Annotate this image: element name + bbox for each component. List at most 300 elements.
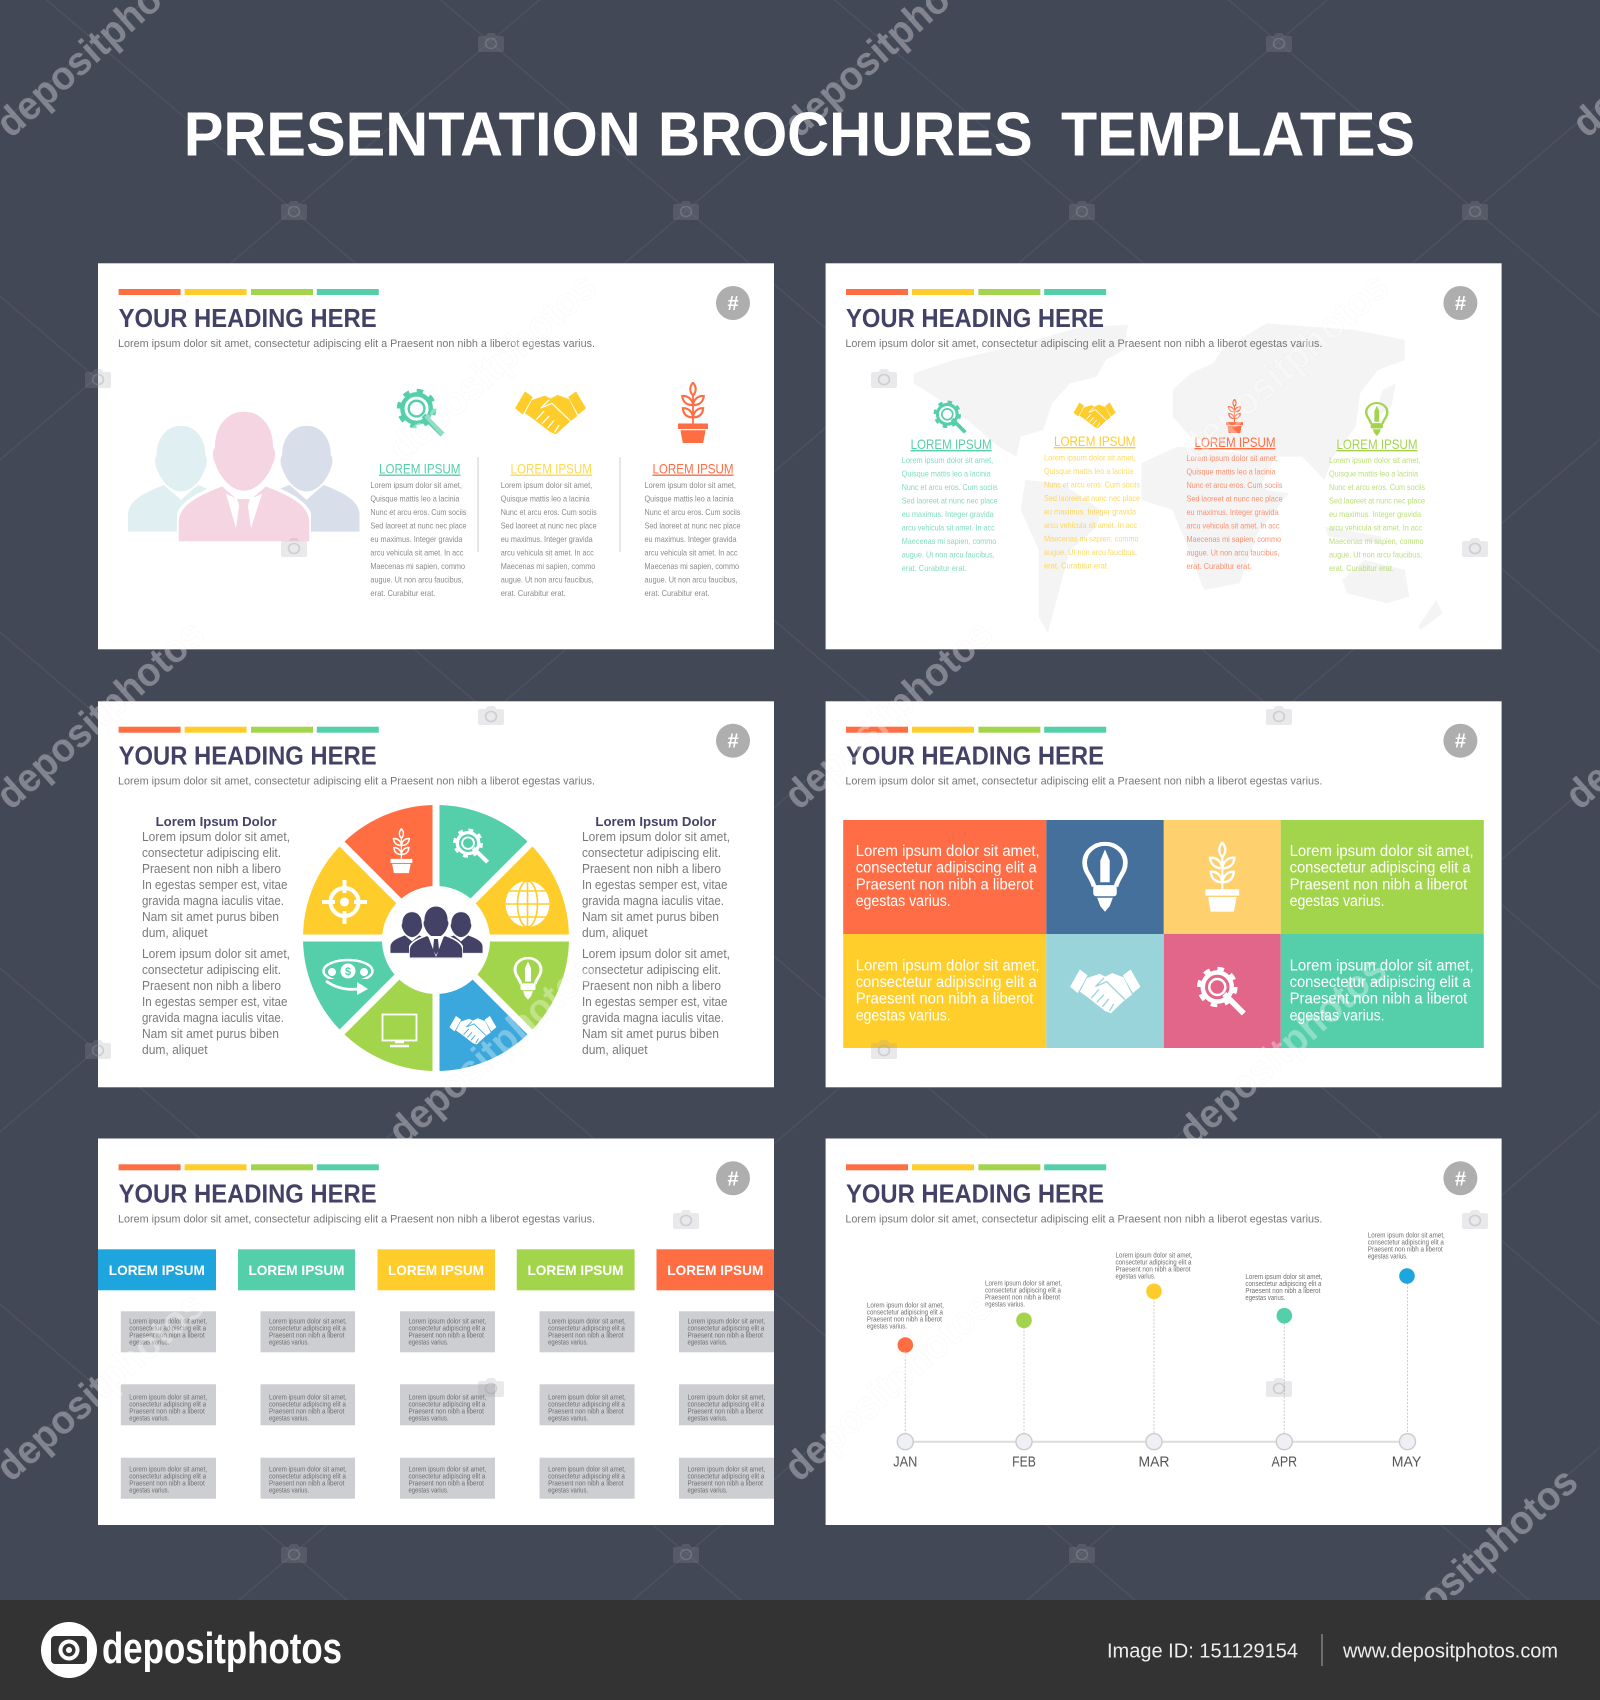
column text 2: eu maximus. Integer gravida (501, 534, 593, 544)
timeline point: MAR (1116, 1252, 1193, 1471)
cell row 1 col 5 (679, 1311, 774, 1352)
title: TEMPLATES (1061, 101, 1415, 170)
tile: teal text: egestas varius. (1290, 1007, 1385, 1024)
cell row 1 col 4: egestas varius. (548, 1339, 588, 1346)
timeline point: MAY: consectetur adipiscing elit a (1368, 1239, 1444, 1246)
panel header (845, 1161, 1477, 1225)
panel header: YOUR HEADING HERE (846, 303, 1104, 333)
watermarks: depositphotos (776, 611, 1001, 818)
column text 3: Sed laoreet at nunc nec place (1186, 494, 1283, 504)
column text 3: augue. Ut non arcu faucibus, (644, 574, 738, 584)
panel header: # (1455, 1168, 1466, 1190)
tile: yellow text: consectetur adipiscing elit a (856, 974, 1037, 991)
tile: green text: consectetur adipiscing elit a (1290, 860, 1471, 877)
watermarks: depositphotos (1361, 1459, 1586, 1666)
timeline point: JAN (867, 1303, 944, 1471)
tile: orange text (843, 820, 1046, 934)
cell row 3 col 1: consectetur adipiscing elit a (129, 1474, 206, 1481)
panel header: # (1455, 731, 1466, 753)
cell row 1 col 5: Lorem ipsum dolor sit amet, (688, 1318, 765, 1325)
cell row 1 col 4 (540, 1311, 635, 1352)
tile: teal text: Praesent non nibh a liberot (1290, 991, 1468, 1008)
footer logo: depositphotos (102, 1624, 342, 1673)
world map (914, 323, 1443, 633)
timeline point: MAY: Lorem ipsum dolor sit amet, (1368, 1232, 1445, 1239)
icon: plant (678, 383, 708, 443)
timeline point: APR (1245, 1274, 1322, 1471)
column header 5 (656, 1249, 774, 1290)
left text block: Lorem ipsum dolor sit amet, (142, 946, 290, 961)
icon: light bulb (515, 958, 541, 1000)
cell row 2 col 3: Praesent non nibh a liberot (408, 1408, 484, 1415)
column text 2: erat. Curabitur erat. (501, 588, 566, 598)
column text 1: Nunc et arcu eros. Cum sociis (902, 482, 998, 492)
watermarks: depositphotos (1170, 947, 1395, 1154)
column text 1: Maecenas mi sapien, commo (370, 561, 465, 571)
panel header (118, 724, 750, 788)
cell row 1 col 2: consectetur adipiscing elit a (269, 1325, 346, 1332)
cell row 3 col 5 (679, 1458, 774, 1499)
timeline point: JAN: Praesent non nibh a liberot (867, 1317, 942, 1324)
cell row 2 col 4: Lorem ipsum dolor sit amet, (548, 1394, 626, 1401)
column text 2: Quisque mattis leo a lacinia (501, 494, 590, 504)
panel: table of columns (98, 1138, 774, 1525)
cell row 1 col 2 (260, 1311, 355, 1352)
column text 1: augue. Ut non arcu faucibus, (370, 574, 463, 584)
cell row 1 col 4: Lorem ipsum dolor sit amet, (548, 1318, 626, 1325)
footer logo (41, 1622, 342, 1678)
tile: orange text: Praesent non nibh a liberot (856, 876, 1034, 893)
column heading 1: LOREM IPSUM (911, 436, 992, 452)
panel: team with three columns (98, 263, 774, 649)
panel header: Lorem ipsum dolor sit amet, consectetur adipiscing elit a Praesent non nibh a liberot egestas varius. (118, 338, 595, 350)
timeline point: APR: Lorem ipsum dolor sit amet, (1245, 1274, 1322, 1281)
right text block: consectetur adipiscing elit. (582, 962, 721, 977)
panel header: YOUR HEADING HERE (119, 741, 377, 771)
column header 3 (378, 1249, 495, 1290)
watermarks: depositphotos (380, 947, 605, 1154)
column text 4: Sed laoreet at nunc nec place (1329, 496, 1425, 506)
right text block: gravida magna iaculis vitae. (582, 1010, 724, 1025)
column text 2: Maecenas mi sapien, commo (501, 561, 596, 571)
column text 2: augue. Ut non arcu faucibus, (501, 574, 594, 584)
cell row 2 col 2: Praesent non nibh a liberot (269, 1408, 344, 1415)
tile: yellow text: Lorem ipsum dolor sit amet, (856, 957, 1040, 974)
tile: green text: Praesent non nibh a liberot (1290, 876, 1468, 893)
cell row 2 col 3: Lorem ipsum dolor sit amet, (408, 1394, 486, 1401)
cell row 3 col 5: Praesent non nibh a liberot (688, 1481, 763, 1488)
column text 2: Quisque mattis leo a lacinia (1044, 466, 1133, 476)
panel header (845, 286, 1477, 350)
column text 4: Nunc et arcu eros. Cum sociis (1329, 482, 1425, 492)
cell row 2 col 4 (540, 1384, 635, 1425)
cell row 3 col 3 (400, 1458, 495, 1499)
column text 3: Lorem ipsum dolor sit amet, (1186, 453, 1278, 463)
right text block: Nam sit amet purus biben (582, 1026, 719, 1041)
timeline point: MAR: MAR (1138, 1455, 1170, 1471)
column text 3 (644, 480, 741, 598)
right text block: consectetur adipiscing elit. (582, 845, 721, 860)
column header 2: LOREM IPSUM (248, 1262, 344, 1278)
column text 1: Sed laoreet at nunc nec place (902, 496, 998, 506)
timeline point: JAN: Lorem ipsum dolor sit amet, (867, 1303, 944, 1310)
icon: plant (1226, 399, 1243, 433)
panel header: YOUR HEADING HERE (119, 303, 377, 333)
column text 3: erat. Curabitur erat. (1186, 561, 1252, 571)
left text block: In egestas semper est, vitae (142, 877, 288, 892)
icon: monitor (382, 1014, 416, 1046)
cell row 2 col 2: egestas varius. (269, 1415, 309, 1422)
cell row 3 col 2: Lorem ipsum dolor sit amet, (269, 1467, 347, 1474)
cell row 2 col 5: egestas varius. (688, 1415, 728, 1422)
tile: green text (1281, 820, 1484, 934)
cell row 1 col 1: egestas varius. (129, 1339, 169, 1346)
right text block: Lorem Ipsum Dolor (595, 814, 716, 829)
panel: circular wheel (98, 701, 774, 1087)
left text block: gravida magna iaculis vitae. (142, 893, 284, 908)
left text block: consectetur adipiscing elit. (142, 962, 281, 977)
cell row 3 col 2 (260, 1458, 355, 1499)
column text 4: augue. Ut non arcu faucibus, (1329, 550, 1422, 560)
column text 3 (1186, 453, 1283, 571)
column text 1: erat. Curabitur erat. (902, 563, 967, 573)
column text 1 (370, 480, 467, 598)
column heading 2: LOREM IPSUM (510, 460, 592, 476)
column text 3: Maecenas mi sapien, commo (644, 561, 739, 571)
column text 1: eu maximus. Integer gravida (370, 534, 463, 544)
right text block: In egestas semper est, vitae (582, 877, 728, 892)
timeline point: FEB (985, 1280, 1062, 1471)
column text 3: Lorem ipsum dolor sit amet, (644, 480, 736, 490)
footer bar (0, 1600, 1600, 1700)
panel header: Lorem ipsum dolor sit amet, consectetur adipiscing elit a Praesent non nibh a liberot egestas varius. (845, 776, 1322, 788)
column text 1: Maecenas mi sapien, commo (902, 536, 997, 546)
cell row 3 col 4 (540, 1458, 635, 1499)
cell row 2 col 5: Lorem ipsum dolor sit amet, (688, 1394, 765, 1401)
column heading 3: LOREM IPSUM (1194, 434, 1276, 450)
column text 2: Nunc et arcu eros. Cum sociis (501, 507, 597, 517)
tile: cyan handshake (1046, 934, 1164, 1048)
panel: world map with four columns (826, 263, 1502, 649)
column text 1: augue. Ut non arcu faucibus, (902, 550, 995, 560)
icon: handshake (515, 391, 586, 434)
right text block: Lorem ipsum dolor sit amet, (582, 946, 730, 961)
cell row 3 col 4: consectetur adipiscing elit a (548, 1474, 625, 1481)
cell row 1 col 4: Praesent non nibh a liberot (548, 1332, 624, 1339)
cell row 2 col 1 (121, 1384, 216, 1425)
panel header: # (727, 731, 739, 753)
column header 1 (98, 1249, 216, 1290)
panel header: # (1455, 293, 1466, 315)
panel header (118, 286, 750, 350)
icon: money with arrow: $ (345, 966, 351, 978)
panel header: Lorem ipsum dolor sit amet, consectetur adipiscing elit a Praesent non nibh a liberot egestas varius. (845, 338, 1322, 350)
right text block: In egestas semper est, vitae (582, 994, 728, 1009)
icon: gear and magnifier (935, 402, 965, 432)
left text block: dum, aliquet (142, 925, 208, 940)
watermarks: depositphotos (1172, 264, 1397, 471)
cell row 2 col 5: Praesent non nibh a liberot (688, 1408, 763, 1415)
column text 4 (1329, 455, 1425, 573)
cell row 3 col 1 (121, 1458, 216, 1499)
column text 3: Nunc et arcu eros. Cum sociis (644, 507, 740, 517)
column header 2 (238, 1249, 355, 1290)
timeline point: MAR: consectetur adipiscing elit a (1116, 1259, 1192, 1266)
timeline point: MAR: egestas varius. (1116, 1273, 1156, 1280)
column text 1: Quisque mattis leo a lacinia (902, 468, 991, 478)
cell row 1 col 1: Lorem ipsum dolor sit amet, (129, 1318, 207, 1325)
column text 4: eu maximus. Integer gravida (1329, 509, 1421, 519)
column text 3: Quisque mattis leo a lacinia (644, 494, 734, 504)
icon: handshake (1074, 403, 1116, 428)
cell row 3 col 3: Praesent non nibh a liberot (408, 1481, 484, 1488)
tile: teal text (1281, 934, 1484, 1048)
icon: plant (390, 829, 412, 873)
cell row 3 col 1: Lorem ipsum dolor sit amet, (129, 1467, 207, 1474)
panel: timeline (826, 1138, 1502, 1525)
icon: gear and magnifier (399, 391, 443, 435)
panel header: Lorem ipsum dolor sit amet, consectetur adipiscing elit a Praesent non nibh a liberot egestas varius. (118, 776, 595, 788)
left text block: Nam sit amet purus biben (142, 909, 279, 924)
column text 3: arcu vehicula sit amet. In acc (644, 548, 738, 558)
cell row 2 col 4: consectetur adipiscing elit a (548, 1401, 625, 1408)
cell row 3 col 4: Lorem ipsum dolor sit amet, (548, 1467, 626, 1474)
timeline point: JAN: JAN (893, 1455, 917, 1471)
cell row 3 col 3: consectetur adipiscing elit a (408, 1474, 485, 1481)
column text 4: Quisque mattis leo a lacinia (1329, 468, 1418, 478)
cell row 1 col 3 (400, 1311, 495, 1352)
right text block: dum, aliquet (582, 925, 648, 940)
panel header: # (727, 1168, 739, 1190)
tile: blue bulb (1046, 820, 1164, 934)
column text 1: Quisque mattis leo a lacinia (370, 494, 460, 504)
column text 2: Lorem ipsum dolor sit amet, (1044, 452, 1136, 462)
tile: yellow text: Praesent non nibh a liberot (856, 991, 1034, 1008)
cell row 2 col 3: consectetur adipiscing elit a (408, 1401, 485, 1408)
cell row 2 col 2 (260, 1384, 355, 1425)
column text 3: erat. Curabitur erat. (644, 588, 710, 598)
panel header (845, 724, 1477, 788)
column text 3: Nunc et arcu eros. Cum sociis (1186, 480, 1282, 490)
column text 1: Sed laoreet at nunc nec place (370, 520, 467, 530)
watermarks: depositphotos (776, 1283, 1001, 1490)
column text 3: Sed laoreet at nunc nec place (644, 520, 741, 530)
timeline point: FEB: Lorem ipsum dolor sit amet, (985, 1280, 1062, 1287)
right text block: Praesent non nibh a libero (582, 978, 721, 993)
panel header: YOUR HEADING HERE (846, 1178, 1104, 1208)
tile: yellow text: egestas varius. (856, 1007, 951, 1024)
cell row 2 col 1: Lorem ipsum dolor sit amet, (129, 1394, 207, 1401)
left text block: dum, aliquet (142, 1042, 208, 1057)
footer image id: Image ID: 151129154 (1107, 1640, 1298, 1662)
column header 4: LOREM IPSUM (528, 1262, 624, 1278)
timeline point: APR: Praesent non nibh a liberot (1245, 1288, 1320, 1295)
timeline point: MAY: egestas varius. (1368, 1253, 1408, 1260)
cell row 2 col 4: Praesent non nibh a liberot (548, 1408, 624, 1415)
column text 3: Quisque mattis leo a lacinia (1186, 466, 1276, 476)
cell row 2 col 5 (679, 1384, 774, 1425)
icon: globe (506, 881, 550, 927)
column text 3: eu maximus. Integer gravida (1186, 507, 1279, 517)
column text 4: arcu vehicula sit amet. In acc (1329, 522, 1422, 532)
icon: gear and magnifier (455, 830, 488, 862)
cell row 2 col 2: Lorem ipsum dolor sit amet, (269, 1394, 347, 1401)
panel header: YOUR HEADING HERE (119, 1178, 377, 1208)
tile: green text: Lorem ipsum dolor sit amet, (1290, 843, 1474, 860)
tile: orange text: Lorem ipsum dolor sit amet, (856, 843, 1040, 860)
title: BROCHURES (658, 101, 1033, 170)
right text block: gravida magna iaculis vitae. (582, 893, 724, 908)
column text 1: arcu vehicula sit amet. In acc (902, 522, 995, 532)
tile: light yellow plant (1164, 820, 1281, 934)
column text 3: eu maximus. Integer gravida (644, 534, 737, 544)
icon: three people silhouettes (128, 410, 360, 543)
tile: orange text: egestas varius. (856, 893, 951, 910)
column heading 3: LOREM IPSUM (652, 460, 734, 476)
right text block: Lorem ipsum dolor sit amet, (582, 829, 730, 844)
cell row 1 col 5: Praesent non nibh a liberot (688, 1332, 763, 1339)
column header 5: LOREM IPSUM (667, 1262, 763, 1278)
cell row 1 col 3: Lorem ipsum dolor sit amet, (408, 1318, 486, 1325)
column text 2 (1044, 452, 1140, 570)
tile: yellow text (843, 934, 1046, 1048)
column text 2: arcu vehicula sit amet. In acc (501, 548, 594, 558)
cell row 3 col 4: Praesent non nibh a liberot (548, 1481, 624, 1488)
column text 2: Sed laoreet at nunc nec place (1044, 493, 1140, 503)
column heading 1: LOREM IPSUM (379, 460, 460, 476)
timeline point: MAY (1368, 1232, 1445, 1471)
cell row 1 col 2: Praesent non nibh a liberot (269, 1332, 344, 1339)
column text 1: erat. Curabitur erat. (370, 588, 435, 598)
tile: pink gear (1164, 934, 1281, 1048)
timeline point: MAY: MAY (1392, 1455, 1422, 1471)
cell row 2 col 2: consectetur adipiscing elit a (269, 1401, 346, 1408)
panel header: Lorem ipsum dolor sit amet, consectetur adipiscing elit a Praesent non nibh a liberot egestas varius. (118, 1213, 595, 1225)
left text block: Praesent non nibh a libero (142, 861, 281, 876)
right text block: Praesent non nibh a libero (582, 861, 721, 876)
column header 1: LOREM IPSUM (109, 1262, 205, 1278)
column text 1: arcu vehicula sit amet. In acc (370, 548, 463, 558)
timeline point: MAR: Praesent non nibh a liberot (1116, 1266, 1191, 1273)
tile: teal text: Lorem ipsum dolor sit amet, (1290, 957, 1474, 974)
cell row 2 col 1: consectetur adipiscing elit a (129, 1401, 206, 1408)
cell row 3 col 4: egestas varius. (548, 1488, 588, 1495)
cell row 2 col 1: egestas varius. (129, 1415, 169, 1422)
cell row 3 col 5: consectetur adipiscing elit a (688, 1474, 764, 1481)
left text block: Praesent non nibh a libero (142, 978, 281, 993)
cell row 3 col 2: Praesent non nibh a liberot (269, 1481, 344, 1488)
column text 1 (902, 455, 998, 573)
icon: money with arrow (324, 960, 372, 995)
tile: teal text: consectetur adipiscing elit a (1290, 974, 1471, 991)
cell row 1 col 5: consectetur adipiscing elit a (688, 1325, 764, 1332)
timeline point: JAN: egestas varius. (867, 1324, 907, 1331)
column text 2: Nunc et arcu eros. Cum sociis (1044, 479, 1140, 489)
timeline point: APR: consectetur adipiscing elit a (1245, 1281, 1321, 1288)
cell row 1 col 2: Lorem ipsum dolor sit amet, (269, 1318, 347, 1325)
cell row 1 col 2: egestas varius. (269, 1339, 309, 1346)
cell row 1 col 1 (121, 1311, 216, 1352)
column text 2: augue. Ut non arcu faucibus, (1044, 547, 1137, 557)
panel header: # (727, 293, 739, 315)
timeline point: FEB: FEB (1012, 1455, 1036, 1471)
column header 4 (517, 1249, 635, 1290)
icon: central people group (390, 906, 483, 958)
column text 1: Nunc et arcu eros. Cum sociis (370, 507, 466, 517)
timeline point: JAN: consectetur adipiscing elit a (867, 1310, 943, 1317)
column text 3: Maecenas mi sapien, commo (1186, 534, 1281, 544)
left text block: In egestas semper est, vitae (142, 994, 288, 1009)
tile: orange text: consectetur adipiscing elit a (856, 860, 1037, 877)
timeline point: MAY: Praesent non nibh a liberot (1368, 1246, 1443, 1253)
cell row 1 col 3: egestas varius. (408, 1339, 449, 1346)
column heading 2: LOREM IPSUM (1054, 433, 1136, 449)
left text block: Lorem Ipsum Dolor (156, 814, 277, 829)
cell row 3 col 1: egestas varius. (129, 1488, 169, 1495)
column text 2: erat. Curabitur erat. (1044, 560, 1109, 570)
cell row 2 col 5: consectetur adipiscing elit a (688, 1401, 764, 1408)
icon: light bulb (1366, 403, 1387, 436)
footer url: www.depositphotos.com (1342, 1640, 1558, 1662)
right text block (582, 814, 730, 1057)
tile: green text: egestas varius. (1290, 893, 1385, 910)
cell row 1 col 3: Praesent non nibh a liberot (408, 1332, 484, 1339)
column text 2: arcu vehicula sit amet. In acc (1044, 520, 1137, 530)
cell row 3 col 1: Praesent non nibh a liberot (129, 1481, 205, 1488)
cell row 2 col 3 (400, 1384, 495, 1425)
watermarks: depositphotos (380, 264, 605, 471)
column text 2: Lorem ipsum dolor sit amet, (501, 480, 592, 490)
column text 4: erat. Curabitur erat. (1329, 563, 1394, 573)
title: PRESENTATION (184, 101, 641, 170)
column text 2: Maecenas mi sapien, commo (1044, 533, 1139, 543)
timeline point: FEB: Praesent non nibh a liberot (985, 1294, 1060, 1301)
left text block: gravida magna iaculis vitae. (142, 1010, 284, 1025)
cell row 2 col 4: egestas varius. (548, 1415, 588, 1422)
cell row 3 col 5: Lorem ipsum dolor sit amet, (688, 1467, 765, 1474)
timeline point: APR: egestas varius. (1245, 1295, 1285, 1302)
timeline point: FEB: consectetur adipiscing elit a (985, 1287, 1061, 1294)
column text 2: Sed laoreet at nunc nec place (501, 520, 597, 530)
panel header: Lorem ipsum dolor sit amet, consectetur adipiscing elit a Praesent non nibh a liberot egestas varius. (845, 1213, 1322, 1225)
right text block: dum, aliquet (582, 1042, 648, 1057)
cell row 1 col 1: consectetur adipiscing elit a (129, 1325, 206, 1332)
left text block: Lorem ipsum dolor sit amet, (142, 829, 290, 844)
cell row 3 col 3: egestas varius. (408, 1488, 449, 1495)
column text 3: augue. Ut non arcu faucibus, (1186, 548, 1280, 558)
right text block: Nam sit amet purus biben (582, 909, 719, 924)
panel header: YOUR HEADING HERE (846, 741, 1104, 771)
left text block: consectetur adipiscing elit. (142, 845, 281, 860)
cell row 3 col 2: egestas varius. (269, 1488, 309, 1495)
column text 4: Maecenas mi sapien, commo (1329, 536, 1424, 546)
timeline point: MAR: Lorem ipsum dolor sit amet, (1116, 1252, 1193, 1259)
column text 4: Lorem ipsum dolor sit amet, (1329, 455, 1420, 465)
column heading 4: LOREM IPSUM (1336, 436, 1418, 452)
cell row 1 col 3: consectetur adipiscing elit a (408, 1325, 485, 1332)
cell row 3 col 5: egestas varius. (688, 1488, 728, 1495)
icon: target (322, 880, 367, 924)
cell row 1 col 4: consectetur adipiscing elit a (548, 1325, 625, 1332)
title (184, 101, 1415, 170)
column text 2 (501, 480, 597, 598)
icon: handshake (449, 1016, 496, 1045)
cell row 1 col 1: Praesent non nibh a liberot (129, 1332, 205, 1339)
cell row 2 col 1: Praesent non nibh a liberot (129, 1408, 205, 1415)
left text block (142, 814, 290, 1057)
column text 2: eu maximus. Integer gravida (1044, 506, 1136, 516)
timeline point: FEB: egestas varius. (985, 1301, 1025, 1308)
